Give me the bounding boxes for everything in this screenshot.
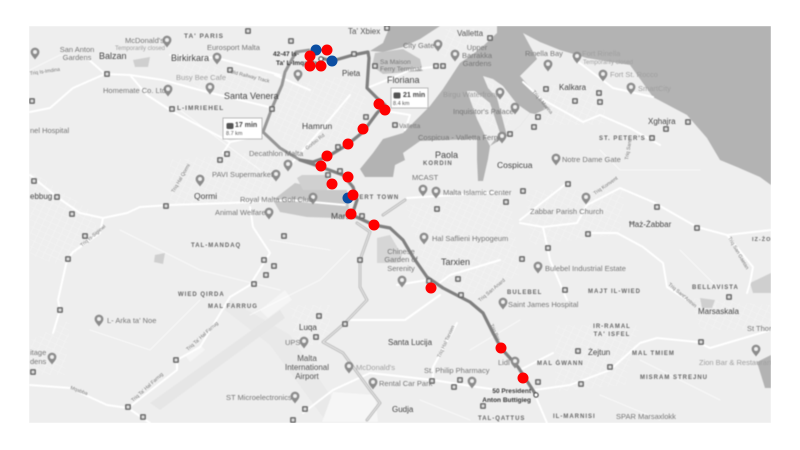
map labels: Notre Dame Gate (562, 155, 621, 164)
origin label: 42-47 Is- (273, 51, 299, 58)
map labels: Ferry Terminal (380, 66, 422, 73)
map labels: Balzan (99, 51, 127, 61)
map labels: Gardens (463, 59, 492, 68)
map labels: Chinese (387, 247, 415, 256)
map labels: ALBERT TOWN (344, 195, 399, 201)
map labels: Triq Il Marina (530, 89, 554, 116)
land: Birgu peninsula (483, 76, 530, 136)
map labels: Birgu Waterfront (443, 90, 498, 99)
map labels: Marsa (331, 211, 355, 221)
map labels: Triq Is-Imdina (29, 67, 61, 77)
map labels: McDonald's (125, 36, 164, 45)
callout: 17 min (223, 118, 262, 139)
land: Senglea peninsula (467, 91, 500, 146)
map labels: TAL-QATTUS (478, 416, 525, 422)
map labels: Bulebel Industrial Estate (545, 264, 626, 273)
map labels: Triq Sant'Antnin (667, 282, 698, 309)
map labels: Marsaskala (698, 307, 739, 316)
map labels: Busy Bee Cafe (176, 73, 226, 82)
map labels: itage (30, 348, 46, 357)
origin marker (319, 57, 323, 61)
map labels: San Anton (60, 45, 94, 54)
map labels: Valletta (399, 123, 421, 130)
map labels: Paola (435, 150, 458, 160)
map labels: Ta' Xbiex (348, 27, 380, 36)
origin label (273, 51, 318, 67)
map labels: Xghajra (648, 117, 676, 126)
destination label: Anton Buttigieg (482, 397, 531, 404)
map labels: Upper (467, 43, 488, 52)
destination label: 50 President (492, 388, 532, 395)
water: Marsaskala bay (757, 355, 771, 388)
map labels: SmartCity (638, 84, 671, 93)
map labels: Cospicua - Valletta Ferry (418, 133, 500, 142)
map labels: Inquisitor's Palace (453, 107, 514, 116)
place pin icons (31, 36, 760, 403)
water: Marsamxett (370, 26, 440, 52)
map labels: TA' ISFEL (594, 332, 630, 338)
map labels: IZ-ŻONQOR (752, 236, 792, 243)
map labels: Fort St. Rocco (610, 70, 658, 79)
data markers (304, 44, 528, 384)
map labels: Airport (295, 372, 320, 381)
blue marker (342, 192, 354, 204)
map labels: Lidl (498, 358, 510, 367)
map labels: Decathlon Malta (249, 149, 304, 158)
map labels: Valletta (457, 29, 484, 38)
map labels: L-IMRIEHEL (177, 105, 224, 112)
map labels: KORDIN (423, 161, 453, 167)
map labels: International (285, 363, 329, 372)
map labels: Triq Ta' Hal Farrug (185, 320, 220, 352)
callout: 21 min (391, 88, 428, 108)
map labels: Saint James Hospital (508, 300, 579, 309)
map labels: Sa Maison (380, 59, 411, 66)
map labels: Triq Is-Sigiewi (79, 224, 107, 249)
map labels: MISRAM STREJNU (640, 375, 708, 381)
map labels: Floriana (387, 75, 420, 85)
map labels: Homemate Co. Ltd (103, 86, 166, 95)
destination label (482, 388, 532, 404)
map labels: St. Philip Pharmacy (424, 366, 490, 375)
map labels: Tarxien (441, 257, 470, 267)
map labels: Cospicua (497, 160, 533, 170)
map labels: IR-RAMAL (593, 324, 631, 330)
map labels: Triq Hal Qormi (171, 163, 192, 194)
map labels: Zion Bar & Restaurant (699, 358, 774, 367)
map labels: MAL TMIEM (632, 351, 675, 357)
map labels: Garden of (384, 255, 419, 264)
map labels: St Thomas (747, 324, 783, 333)
map labels: Qormi (194, 191, 217, 201)
map labels: Hal Saflieni Hypogeum (432, 234, 508, 243)
map labels: Malta (297, 354, 317, 363)
callout: 21 min: 21 min (403, 92, 425, 99)
map labels: Triq Hal Tarxien (436, 325, 457, 359)
map labels: ST Microelectronics (226, 393, 292, 402)
map labels: Gorbio Rd (305, 133, 326, 152)
route: 21 min main (300, 52, 536, 395)
map labels: Gardens (63, 53, 92, 62)
map labels: Santa Venera (224, 91, 279, 101)
map labels: Santa Lucija (388, 338, 433, 347)
map labels: ST. PETER'S (599, 136, 646, 142)
map labels: Eurosport Malta (207, 43, 261, 52)
map labels: Ħaż-Żabbar (629, 220, 672, 229)
map labels: Birkirkara (171, 53, 209, 63)
map labels: Animal Welfare (215, 208, 266, 217)
water: Pieta creek shading (372, 49, 423, 74)
map labels: MAL ĠWANN (537, 360, 584, 367)
alternate routes (323, 200, 405, 420)
map labels: TAL-MANDAQ (191, 243, 241, 249)
map labels: MCAST (412, 173, 439, 182)
map labels: Old Railway Track (230, 69, 271, 85)
map labels: Barrakka (462, 51, 493, 60)
map labels: BELLAVISTA (692, 285, 739, 291)
map labels: Royal Malta Golf Club (240, 195, 313, 204)
map labels: Triq Ta' Hal Farrug (130, 371, 165, 403)
map labels: City Gate (403, 41, 434, 50)
map labels: McDonald's (356, 363, 395, 372)
callout: 17 min: 8.7 km (226, 131, 243, 137)
map labels: Hamrun (302, 121, 333, 131)
map labels: MAL FARRUG (208, 304, 258, 310)
map labels: Malta Islamic Center (443, 188, 512, 197)
map labels: Temporarily closed (115, 46, 165, 52)
map labels: Rinella Bay (525, 49, 563, 58)
road network (30, 55, 771, 423)
map labels: Triq Bor (488, 323, 501, 342)
map labels: Fort Rinella (582, 49, 621, 58)
water: sea and Grand Harbour (360, 26, 771, 185)
callout: 17 min: 17 min (235, 122, 257, 129)
map labels: ebbug (30, 192, 52, 201)
blue marker (326, 56, 338, 66)
blue marker (310, 44, 322, 56)
map labels: Serenity (387, 264, 415, 273)
red markers (304, 44, 528, 384)
callout: 21 min: 8.4 km (393, 101, 410, 107)
map labels: MAJT IL-WIED (588, 289, 641, 295)
map labels: Triq San Anard (477, 277, 507, 304)
parks and golf course (133, 57, 771, 308)
map labels: Kalkara (559, 83, 587, 92)
map labels: L- Arka ta' Noe (107, 316, 156, 325)
map labels: Rental Car Park (379, 379, 433, 388)
map labels: nel Hospital (30, 126, 70, 135)
map labels: BULEBEL (507, 290, 542, 296)
map labels: Pieta (342, 69, 361, 78)
map labels: SPAR Marsaxlokk (616, 412, 676, 421)
transit stop icons (29, 25, 732, 423)
route: 17 min alternative (263, 50, 310, 160)
map labels: WIED QIRDA (178, 292, 225, 298)
map labels: TA' PARIS (184, 33, 224, 40)
map labels: UPS (285, 338, 300, 347)
map labels: PAVI Supermarket (212, 170, 274, 179)
destination marker (534, 393, 538, 397)
map labels: dens (30, 357, 47, 366)
map labels: Triq Sant' (624, 139, 634, 160)
town street blocks (544, 108, 546, 110)
map labels: Triq Konvent (593, 175, 620, 197)
airport runways (150, 290, 378, 422)
map labels: Luqa (299, 323, 317, 332)
map labels: Triq San Gaetan (726, 236, 750, 271)
map labels: Mqabba (69, 385, 89, 397)
map labels: IL-MARNISI (553, 414, 596, 420)
map labels: Żejtun (588, 348, 610, 357)
map labels: Gudja (392, 405, 414, 414)
origin label: Ta' L-Imqadfa (276, 60, 318, 67)
map labels: Zabbar Parish Church (530, 207, 603, 216)
map labels: Temporarily closed (583, 60, 633, 66)
